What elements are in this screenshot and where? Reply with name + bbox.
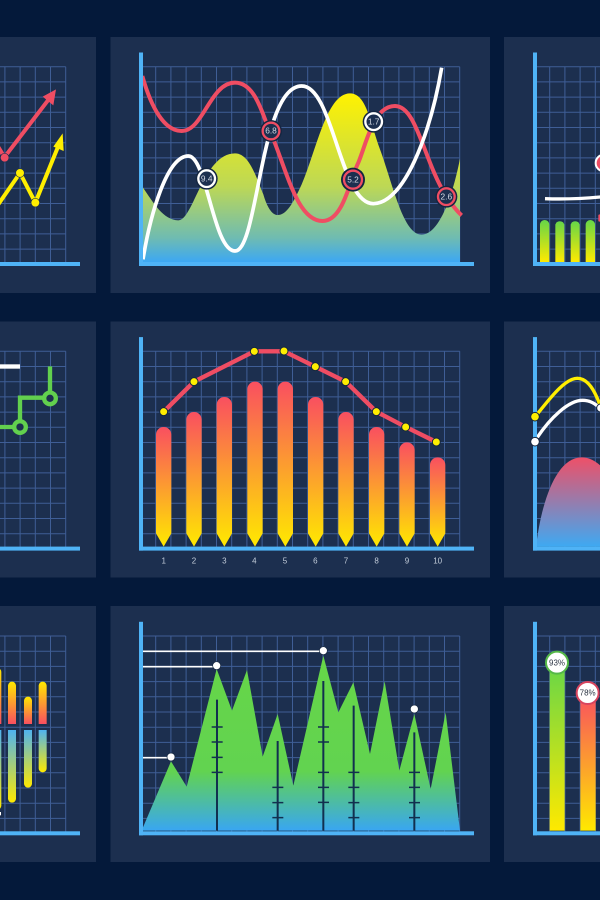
pencil bars (156, 382, 445, 547)
x-axis labels: 1 (161, 557, 166, 566)
pink area (536, 457, 600, 547)
x-axis labels: 4 (252, 557, 257, 566)
red polyline (164, 351, 436, 442)
white curve (537, 400, 600, 437)
badge 2.6: 2.6 (441, 191, 452, 201)
lower bars (0, 730, 47, 810)
panel: middle-right curves (504, 322, 600, 578)
x-axis labels: 10 (433, 557, 443, 566)
white dots (167, 647, 418, 761)
badge 5.2 (341, 168, 365, 192)
badge 6.8: 6.8 (265, 126, 277, 136)
badge 9.4: 9.4 (201, 173, 213, 183)
badge 1.7 (363, 111, 385, 133)
red arrow line (0, 89, 56, 162)
bar 78 percent: 78% (580, 689, 596, 698)
panel: top-right bars (504, 37, 600, 293)
white leader lines (141, 651, 323, 758)
badge 1.7: 1.7 (368, 116, 380, 126)
badge 5.2: 5.2 (347, 174, 359, 184)
x-axis labels (161, 557, 443, 566)
white curve (143, 68, 442, 259)
x-axis labels: 6 (313, 557, 318, 566)
badge 6.8 (260, 120, 282, 142)
yellow arrow line (0, 133, 64, 207)
right white dot (597, 404, 600, 412)
white line (545, 197, 600, 199)
x-axis labels: 7 (344, 557, 349, 566)
upper bars (0, 668, 47, 724)
bar 93 percent: 93% (549, 658, 565, 667)
green step line (0, 366, 56, 433)
yellow curve (537, 378, 600, 414)
white bar (0, 364, 20, 369)
mountain area (143, 656, 460, 831)
white dot (531, 437, 539, 446)
x-axis labels: 5 (283, 557, 288, 566)
panel: bottom-left diverging bars (0, 606, 96, 862)
x-axis labels: 8 (374, 557, 379, 566)
panel: top-center curves (110, 37, 490, 293)
x-axis labels: 9 (405, 557, 410, 566)
x-axis labels: 3 (222, 557, 227, 566)
red curve (142, 76, 462, 221)
partial red bar (598, 214, 600, 222)
red marker (596, 155, 600, 171)
yellow dots (160, 347, 440, 446)
panel: bottom-right percent bars (504, 606, 600, 862)
area chart (143, 93, 460, 263)
badge 2.6 (435, 186, 457, 208)
panel: top-left line arrows (0, 37, 96, 293)
badge 9.4 (196, 168, 218, 190)
green-yellow bars (540, 220, 595, 262)
panel: bottom-center mountains (110, 606, 490, 862)
tick mark (0, 812, 1, 815)
bar 93 percent (546, 652, 568, 831)
yellow dot (531, 412, 539, 421)
bar 78 percent (577, 682, 599, 831)
panel: middle-center bars (110, 322, 490, 578)
panel: middle-left step line (0, 322, 96, 578)
x-axis labels: 2 (192, 557, 197, 566)
dark measure sticks (212, 681, 420, 831)
